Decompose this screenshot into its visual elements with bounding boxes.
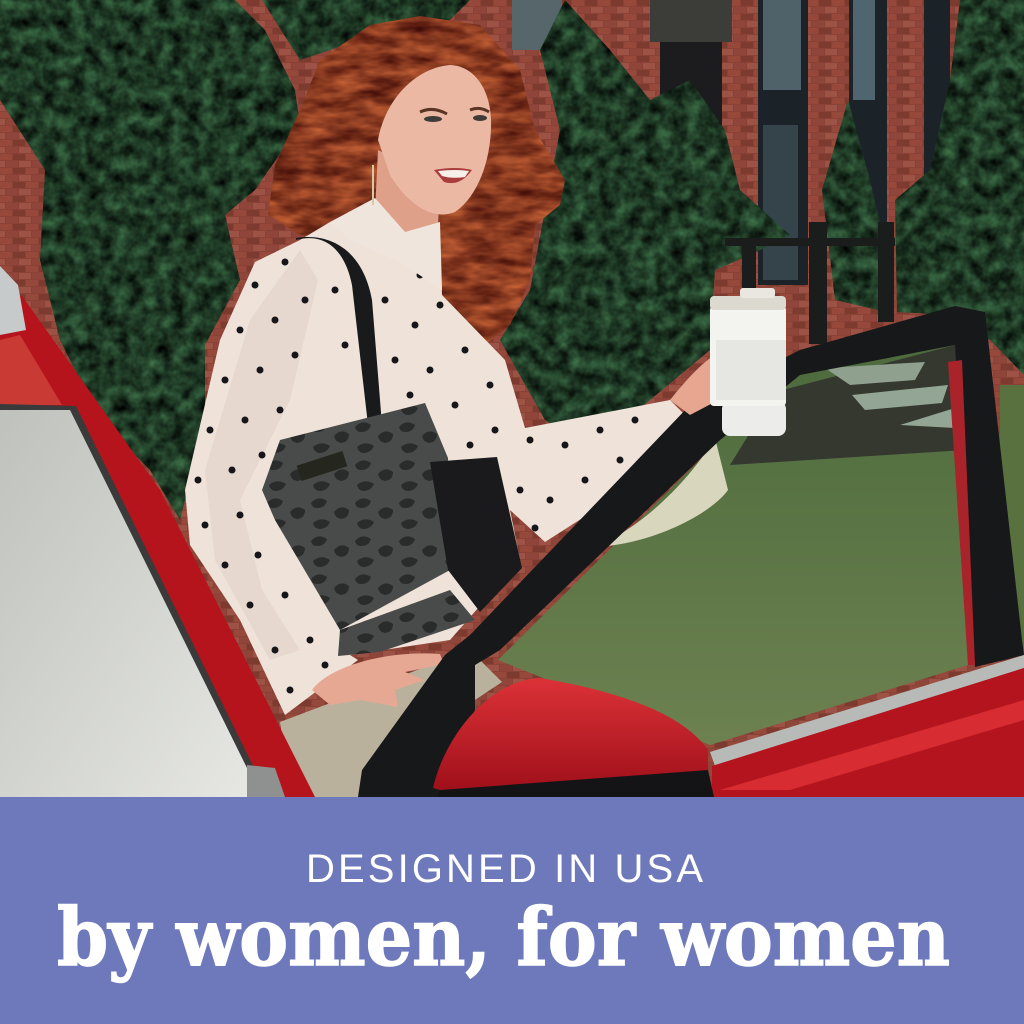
reflected sleeve cuff bbox=[594, 438, 728, 547]
banner headline: by women, for women bbox=[57, 890, 950, 984]
tree: right small cypress bbox=[822, 100, 882, 310]
hair bbox=[268, 16, 565, 345]
blouse sleeve shading bbox=[205, 250, 318, 660]
earring bbox=[372, 165, 374, 205]
raised hand bbox=[670, 350, 728, 415]
woman bbox=[185, 16, 690, 797]
brick wall background bbox=[0, 0, 1024, 797]
side mirror bbox=[433, 678, 714, 797]
tree: right evergreen bbox=[895, 0, 1024, 375]
white tumbler bbox=[710, 288, 786, 436]
car door window glass bbox=[498, 342, 968, 745]
trousers bbox=[280, 650, 502, 797]
banner subheading: DESIGNED IN USA bbox=[306, 847, 703, 891]
handbag straps bbox=[296, 237, 382, 425]
face bbox=[378, 65, 491, 214]
strap buckle bbox=[360, 420, 380, 467]
banner background bbox=[0, 797, 1024, 1024]
blouse bbox=[185, 212, 690, 715]
polka dots bbox=[194, 246, 638, 694]
bag body bbox=[262, 403, 450, 630]
neck bbox=[375, 150, 440, 234]
bag lower gusset bbox=[338, 590, 475, 656]
red door body bbox=[712, 668, 1024, 797]
door chrome trim bbox=[710, 655, 1024, 766]
smile bbox=[434, 168, 472, 183]
door pillar edge bbox=[948, 360, 975, 665]
building windows bbox=[512, 0, 950, 285]
windshield and pillar of red car bbox=[0, 266, 315, 797]
bag side pocket bbox=[430, 457, 522, 612]
handbag bbox=[262, 403, 522, 656]
banner bbox=[0, 797, 1024, 1024]
window reflection: sky and steps bbox=[730, 345, 965, 465]
hand on bag bbox=[312, 653, 444, 707]
tree: upper centre evergreen bbox=[262, 0, 470, 60]
fence posts bbox=[725, 222, 895, 344]
photo scene bbox=[0, 0, 1024, 797]
car door frame bbox=[358, 306, 1024, 797]
evergreen trees bbox=[0, 0, 1024, 520]
lawn edge right bbox=[1000, 385, 1024, 655]
eyes and brows bbox=[420, 108, 489, 122]
high collar bbox=[330, 198, 442, 290]
tree: left evergreen bbox=[0, 0, 300, 520]
bag label bbox=[297, 451, 347, 481]
tree: middle evergreen bbox=[500, 0, 790, 450]
